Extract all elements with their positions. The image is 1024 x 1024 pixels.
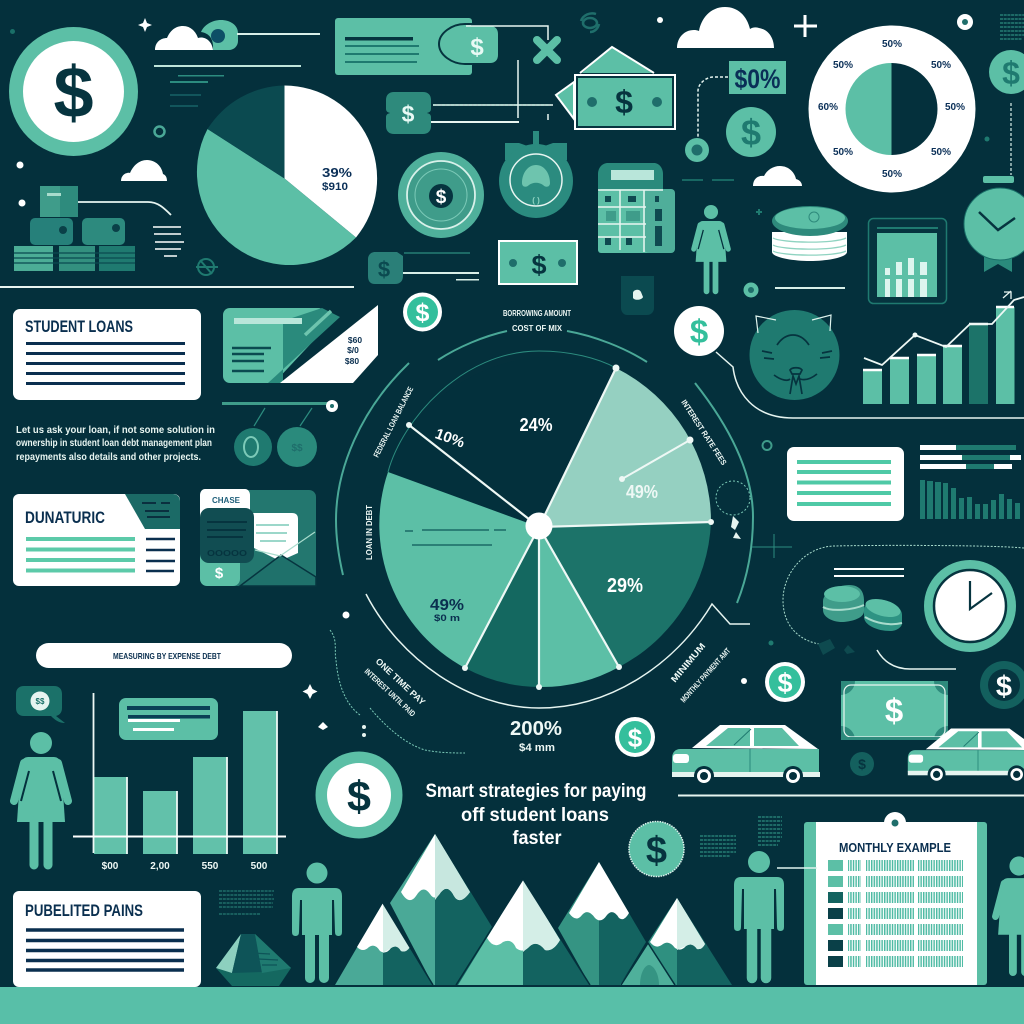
chart: donut with percentage labels: 50%	[833, 147, 853, 158]
icon: small dollar tag: $	[402, 101, 415, 127]
decorative sparkles, lower centre	[302, 612, 350, 730]
icon: white coin with green dollar and connector: $	[690, 313, 708, 350]
icon: white coin with green dollar and connector	[674, 306, 1024, 418]
icon: round badge with stem	[499, 131, 573, 218]
chart: central pie chart: $0 m	[434, 613, 460, 623]
mountains	[335, 834, 732, 985]
icon: small cloud, left	[121, 160, 167, 181]
pill heading	[36, 643, 292, 668]
title	[426, 781, 646, 849]
chart: central pie chart: 24%	[520, 415, 552, 435]
icon: clock with ribbon	[964, 188, 1024, 272]
mountain: small foreground	[620, 943, 675, 985]
callout: green tag in bar chart	[119, 698, 218, 740]
icon: money stacks, left	[14, 186, 184, 271]
panel: green banknote card with lines	[335, 18, 553, 120]
icon: woman figure, right edge	[996, 856, 1024, 972]
chart: lower-left bar chart: 2,00	[150, 861, 170, 872]
panel: right white card with green lines	[787, 447, 904, 521]
icon: green dollar badge above pie	[403, 292, 442, 332]
pie slice: teal 29 percent	[539, 522, 711, 667]
pie ring labels: LOAN IN DEBT	[365, 505, 374, 560]
icon: coin piles and lines	[818, 568, 956, 669]
dashed connector path	[783, 545, 1024, 644]
icon: plus sign	[794, 15, 817, 37]
icon: woman figure, top row	[694, 205, 728, 291]
icon: clock	[924, 560, 1016, 652]
icon: large cloud, top right	[677, 7, 774, 48]
decorative sparkles and dots, top left	[10, 18, 164, 206]
chart: donut with percentage labels: 50%	[931, 147, 951, 158]
chart: donut with percentage labels: 50%	[833, 60, 853, 71]
icon: dark dollar coin, right edge	[980, 661, 1024, 709]
icon: banknote, behind and front: $	[615, 84, 633, 120]
mountain: centre peak	[456, 879, 590, 985]
icon: dollar badge, lower right	[765, 662, 805, 702]
icon: dollar badge, lower right: $	[777, 668, 793, 698]
icon: small dollar tag, lower	[368, 252, 479, 284]
chart: central pie chart: 10%	[433, 425, 467, 452]
chart: top pie chart	[197, 86, 377, 265]
icon: dollar coin near mountains: $	[646, 830, 667, 872]
chart: donut with percentage labels: 50%	[882, 169, 902, 180]
pie slice: teal small	[465, 527, 539, 687]
ring arcs around central pie	[336, 331, 753, 708]
icon: x mark	[537, 40, 557, 60]
badge: dollar coin, centre right: $	[628, 723, 643, 753]
chart: right bar chart with trend line	[863, 297, 1024, 404]
icon: dollar coin, right edge	[989, 50, 1024, 94]
panel: dunaturic card	[13, 494, 180, 586]
icon: cat face piggy bank	[750, 310, 840, 400]
chart: lower-left bar chart: $00	[102, 861, 119, 872]
chart: donut with percentage labels: 60%	[818, 102, 838, 113]
total label under pie	[510, 718, 562, 754]
chart: lower-left bar chart	[73, 693, 286, 872]
icon: cloud with tag and lines	[154, 20, 320, 107]
chart: donut with percentage labels: 50%	[882, 39, 902, 50]
chart: donut with percentage labels: 50%	[931, 60, 951, 71]
chart: central pie chart: 29%	[607, 575, 643, 597]
table heading: MONTHLY EXAMPLE	[839, 840, 951, 855]
decorative dot and swirl	[581, 13, 663, 32]
icon: envelope and note group: $	[215, 565, 224, 582]
icon: small jar	[621, 276, 654, 315]
chart: donut with percentage labels: 50%	[945, 102, 965, 113]
icon: tablet with bars	[868, 218, 946, 304]
icon: envelope and note group	[200, 489, 316, 586]
panel: published pains card	[13, 891, 201, 987]
mountain: tall peak	[390, 834, 500, 985]
table hatched rows	[848, 860, 963, 967]
panel: document with white corner card	[223, 305, 378, 383]
icon: car one	[672, 725, 820, 786]
chart: top pie chart: 39%	[322, 165, 352, 180]
icon: banknote, behind and front	[556, 47, 676, 130]
tiny text fragments	[219, 817, 782, 914]
icon: calculator	[598, 163, 675, 253]
chart: donut with percentage labels	[808, 26, 976, 192]
icon: two hanging coins: $$	[291, 443, 303, 454]
total label under pie: $4 mm	[519, 742, 555, 754]
icon: green dollar coin: $	[741, 112, 761, 153]
icon: small cloud with lines	[682, 166, 802, 186]
pie ring labels	[363, 309, 732, 719]
divider line, left	[0, 286, 354, 288]
icon: banknote, lower right: $	[885, 692, 903, 729]
chart: central pie chart: 49%	[430, 597, 464, 614]
decorative ring and line	[744, 209, 1011, 299]
icon: top-left dollar coin	[9, 27, 138, 156]
text block: intro paragraph: repayments also details and other projects.	[16, 451, 201, 463]
icon: small dark coin: $	[858, 756, 866, 772]
decorative ring and plus, dashed circle	[716, 441, 792, 684]
icon: dollar coin near mountains	[629, 822, 684, 876]
decorative items, top right corner	[957, 14, 1024, 183]
panel: green banknote card with lines: $	[470, 34, 484, 61]
pie ring labels: MINIMUM	[669, 641, 707, 684]
icon: dark dollar coin, right edge: $	[996, 671, 1012, 703]
icon: woman figure, left	[14, 732, 68, 865]
icon: small dollar tag	[386, 92, 551, 134]
pie ring labels: INTEREST RATE FEES	[679, 398, 729, 467]
panel: document with white corner card: $80	[345, 356, 359, 366]
icon: top-left dollar coin: $	[53, 53, 94, 133]
mountain: back right peak	[558, 862, 646, 985]
icon: envelope and note group: OOOOO	[207, 549, 247, 558]
pie ring labels: BORROWING AMOUNT	[503, 309, 571, 318]
callout: 50 percent tag	[685, 61, 786, 162]
icon: dollar coin beside title: $	[347, 773, 371, 821]
icon: swirl near pie	[196, 259, 218, 275]
icon: medal coin	[398, 152, 484, 238]
badge: dollar coin, centre right	[615, 717, 655, 757]
icon: man figure, left of clipboard	[734, 851, 784, 978]
callout: 50 percent tag: $0%	[734, 64, 780, 94]
panel: student loans card	[13, 309, 201, 400]
divider line, lower right	[678, 794, 1024, 796]
chart: top pie chart: $910	[322, 181, 348, 193]
chart: striped progress bars and mini bars	[920, 445, 1021, 519]
icon: two hanging coins	[222, 400, 338, 467]
icon: small banknote: $	[531, 250, 547, 280]
mountain: small left peak	[335, 903, 433, 985]
title: off student loans	[461, 805, 609, 826]
pie ring labels: MONTHLY PAYMENT AMT	[679, 646, 732, 704]
icon: green dollar coin	[726, 107, 776, 157]
title: faster	[512, 828, 562, 849]
pie slice: light 9 percent	[539, 368, 711, 527]
panel: clipboard with table	[777, 812, 987, 985]
chart: central pie chart	[379, 351, 714, 690]
panel: document with white corner card: $60	[348, 335, 362, 345]
icon: dollar coin beside title	[316, 752, 402, 838]
icon: man figure, left of mountains	[292, 862, 342, 978]
total label under pie: 200%	[510, 718, 562, 740]
pie slice: green 49 percent	[379, 472, 539, 668]
icon: round badge with stem: ( )	[532, 196, 540, 205]
icon: medal coin: $	[436, 187, 447, 208]
pie ring labels: INTEREST UNTIL PAID	[363, 667, 417, 719]
dashed connector, lower centre	[330, 630, 465, 753]
icon: green dollar badge above pie: $	[416, 299, 430, 327]
icon: coin stack	[772, 206, 848, 261]
pie ring labels: FEDERAL LOAN BALANCE	[372, 385, 415, 459]
icon: speech bubble	[16, 686, 65, 723]
icon: speech bubble: $$	[36, 697, 45, 706]
icon: polyhedron block	[216, 934, 291, 986]
pie ring labels: ONE TIME PAY	[374, 656, 427, 707]
icon: envelope and note group: CHASE	[212, 496, 241, 505]
text block: intro paragraph	[16, 424, 215, 463]
heading: student loans: STUDENT LOANS	[25, 317, 133, 336]
icon: small dark coin	[850, 752, 874, 776]
title: Smart strategies for paying	[426, 781, 646, 802]
pie ring labels: COST OF MIX	[512, 324, 563, 333]
bottom ground band	[0, 987, 1024, 1024]
pill heading: MEASURING BY EXPENSE DEBT	[113, 651, 222, 661]
icon: small banknote	[498, 240, 578, 285]
table swatches	[828, 860, 843, 967]
icon: dollar coin, right edge: $	[1002, 55, 1020, 91]
pie slice: green small	[539, 527, 619, 687]
pie slice: dark 24 percent	[388, 356, 616, 527]
icon: car two	[908, 728, 1024, 783]
chart: central pie chart: 49%	[626, 482, 658, 502]
icon: small dollar tag, lower: $	[378, 257, 390, 282]
heading: dunaturic: DUNATURIC	[25, 508, 105, 527]
text block: intro paragraph: ownership in student loan debt management plan	[16, 437, 212, 449]
mountain: right peak	[620, 898, 732, 985]
chart: lower-left bar chart: 550	[202, 861, 219, 872]
heading: published pains: PUBELITED PAINS	[25, 901, 143, 920]
icon: banknote, lower right	[841, 681, 948, 740]
panel: document with white corner card: $/0	[347, 345, 359, 355]
chart: lower-left bar chart: 500	[251, 861, 268, 872]
text block: intro paragraph: Let us ask your loan, if not some solution in	[16, 424, 215, 436]
